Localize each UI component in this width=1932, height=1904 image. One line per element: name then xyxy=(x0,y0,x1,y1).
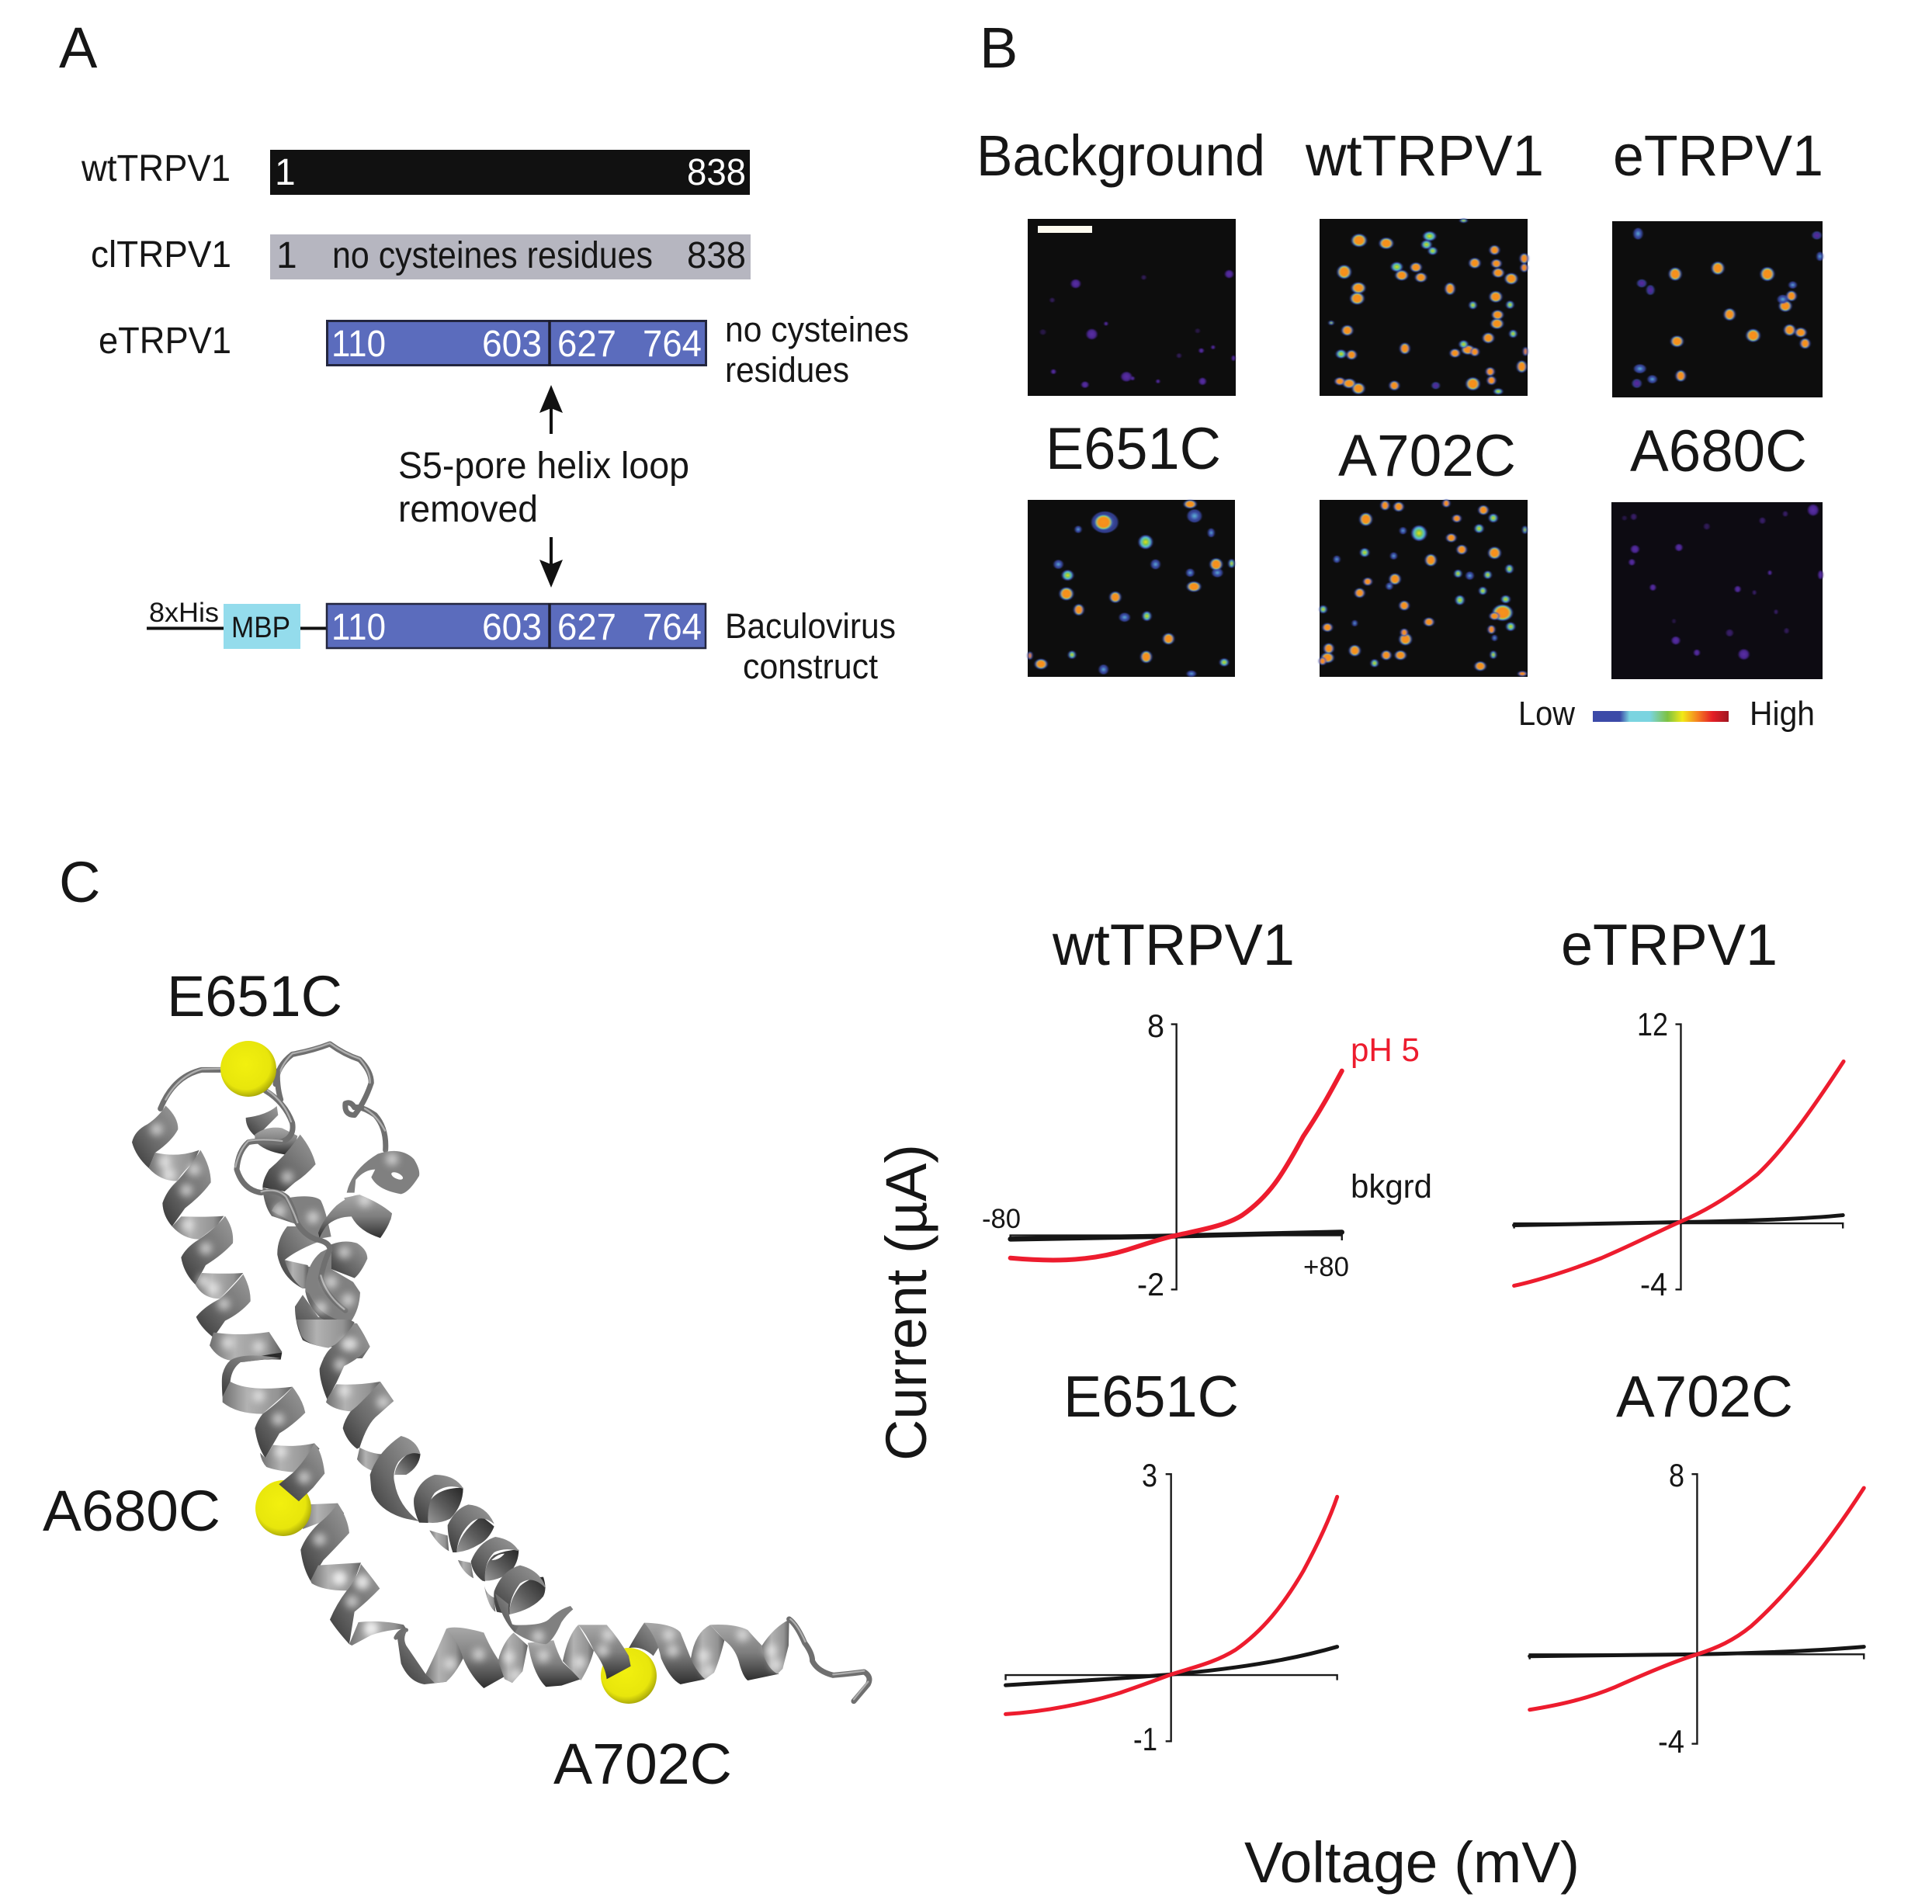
bar: baculovirus construct: 627 xyxy=(557,607,616,648)
image: Background xyxy=(1028,219,1236,396)
bar: clTRPV1: 838 xyxy=(687,235,746,276)
title: eTRPV1 plot: eTRPV1 xyxy=(1561,912,1778,977)
note: no cysteines residues: residues xyxy=(725,350,849,390)
scale bar xyxy=(1038,226,1092,233)
bar: baculovirus construct: 110 xyxy=(331,607,386,648)
label: A702C: A702C xyxy=(553,1732,732,1796)
bar: eTRPV1: 764 xyxy=(643,324,702,365)
bar: wtTRPV1: 1 xyxy=(275,152,296,193)
note: Baculovirus construct: construct xyxy=(743,647,878,686)
note: no cysteines residues xyxy=(725,310,909,390)
chart: wtTRPV1 I-V curves: 8 xyxy=(1147,1007,1164,1044)
label: A680C: A680C xyxy=(43,1479,220,1543)
helix: central and left middle turns xyxy=(210,1320,421,1646)
legend: intensity colour bar: High xyxy=(1750,695,1815,733)
bar: eTRPV1: 110 xyxy=(331,324,386,365)
chart: E651C I-V curves: 3 xyxy=(1142,1457,1157,1493)
heading: panel letter B: B xyxy=(980,16,1018,80)
bar: eTRPV1: 627 xyxy=(557,324,616,365)
label: wtTRPV1: wtTRPV1 xyxy=(81,148,231,189)
bar: wtTRPV1 xyxy=(270,150,750,195)
image: eTRPV1 xyxy=(1612,221,1823,397)
title: E651C plot: E651C xyxy=(1063,1364,1239,1429)
text: S5-pore helix loop removed xyxy=(398,446,689,530)
chart: eTRPV1 I-V curves: 12 xyxy=(1637,1006,1668,1042)
note: no cysteines residues: no cysteines xyxy=(725,310,909,349)
ribbon structure with labelled residues xyxy=(132,1041,869,1704)
bar: eTRPV1 xyxy=(328,321,706,366)
axis label: Current (µA): Current (µA) xyxy=(874,1144,938,1461)
loop: upper thin coils xyxy=(132,1043,419,1358)
bar: eTRPV1: 603 xyxy=(482,324,542,365)
bar: clTRPV1 xyxy=(270,234,751,279)
helix: left upper turns xyxy=(132,1105,251,1337)
title: A702C: A702C xyxy=(1338,423,1516,489)
label: eTRPV1: eTRPV1 xyxy=(99,321,231,362)
title: Background: Background xyxy=(976,123,1265,188)
helix: right turns behind A702C sphere xyxy=(629,1623,660,1656)
chart: eTRPV1 I-V curves xyxy=(1514,1006,1844,1302)
chart: wtTRPV1 I-V curves: -2 xyxy=(1137,1266,1164,1302)
highlights: middle ribbon xyxy=(221,1337,389,1635)
helix: central upper turns xyxy=(246,1106,392,1358)
image: wtTRPV1 xyxy=(1320,219,1528,396)
title: E651C: E651C xyxy=(1046,416,1221,482)
title: wtTRPV1 plot: wtTRPV1 xyxy=(1052,912,1295,977)
arrow: up to eTRPV1 xyxy=(539,385,563,434)
bar: wtTRPV1: 838 xyxy=(687,152,746,193)
box: MBP xyxy=(224,604,300,649)
chart: A702C I-V curves: -4 xyxy=(1658,1723,1684,1760)
axis label: Voltage (mV): Voltage (mV) xyxy=(1244,1830,1580,1895)
chart: wtTRPV1 I-V curves xyxy=(982,1007,1432,1302)
image: A680C xyxy=(1611,502,1823,679)
arrow: down to baculovirus construct xyxy=(539,537,563,588)
bar: clTRPV1: 1 xyxy=(276,235,297,276)
coil: large open turn xyxy=(370,1436,421,1521)
bar: clTRPV1: no cysteines residues xyxy=(332,235,653,276)
title: eTRPV1: eTRPV1 xyxy=(1613,123,1823,188)
chart: E651C I-V curves: -1 xyxy=(1133,1721,1157,1757)
panel: current-voltage plots xyxy=(874,912,1864,1895)
title: A702C plot: A702C xyxy=(1616,1364,1793,1429)
note: Baculovirus construct xyxy=(725,606,896,686)
note: Baculovirus construct: Baculovirus xyxy=(725,606,896,646)
bar: baculovirus construct: 764 xyxy=(643,607,702,648)
image: E651C xyxy=(1028,500,1235,677)
text: S5-pore helix loop removed: S5-pore helix loop xyxy=(398,446,689,487)
chart: A702C I-V curves xyxy=(1530,1457,1864,1760)
image: A702C xyxy=(1320,500,1528,677)
helix: lower coils and bottom turns xyxy=(396,1475,594,1688)
panel: B fluorescence images xyxy=(976,16,1823,733)
legend: bkgrd: bkgrd xyxy=(1351,1168,1432,1205)
chart: E651C I-V curves xyxy=(1006,1457,1337,1757)
sphere: A680C xyxy=(255,1480,311,1536)
label: E651C: E651C xyxy=(167,964,342,1028)
box: MBP: MBP xyxy=(231,612,290,644)
sphere: A702C xyxy=(601,1648,657,1704)
legend: intensity colour bar xyxy=(1518,695,1815,733)
legend: intensity colour bar: Low xyxy=(1518,695,1575,733)
helix end over A702C sphere xyxy=(578,1625,631,1679)
tag: 8xHis line and label: 8xHis xyxy=(149,598,219,628)
highlights: lower ribbon xyxy=(333,1572,614,1681)
helix end over A680C sphere xyxy=(279,1443,324,1501)
highlights: upper ribbon xyxy=(151,1123,398,1351)
chart: wtTRPV1 I-V curves: -80 xyxy=(982,1204,1021,1234)
label: clTRPV1: clTRPV1 xyxy=(91,234,231,276)
chart: eTRPV1 I-V curves: -4 xyxy=(1640,1266,1667,1302)
legend: pH 5: pH 5 xyxy=(1351,1032,1420,1069)
title: A680C: A680C xyxy=(1630,418,1807,484)
title: wtTRPV1: wtTRPV1 xyxy=(1305,123,1544,188)
panel: C structure xyxy=(43,850,869,1796)
heading: panel letter C: C xyxy=(59,850,100,914)
chart: A702C I-V curves: 8 xyxy=(1669,1457,1684,1493)
bar: baculovirus construct: 603 xyxy=(482,607,542,648)
sphere: E651C xyxy=(220,1041,276,1097)
loop: thin coil through central helix xyxy=(235,1091,345,1310)
highlights: right ribbon xyxy=(663,1629,782,1677)
helix: upper right turns xyxy=(344,1151,419,1238)
panel: A construct schematics xyxy=(59,16,909,686)
heading: panel letter A: A xyxy=(59,16,98,80)
chart: wtTRPV1 I-V curves: +80 xyxy=(1303,1252,1349,1282)
helix: C-terminal turns and tail xyxy=(644,1619,869,1701)
linker line xyxy=(300,627,326,630)
text: S5-pore helix loop removed: removed xyxy=(398,489,538,530)
bar: baculovirus construct xyxy=(327,603,706,649)
